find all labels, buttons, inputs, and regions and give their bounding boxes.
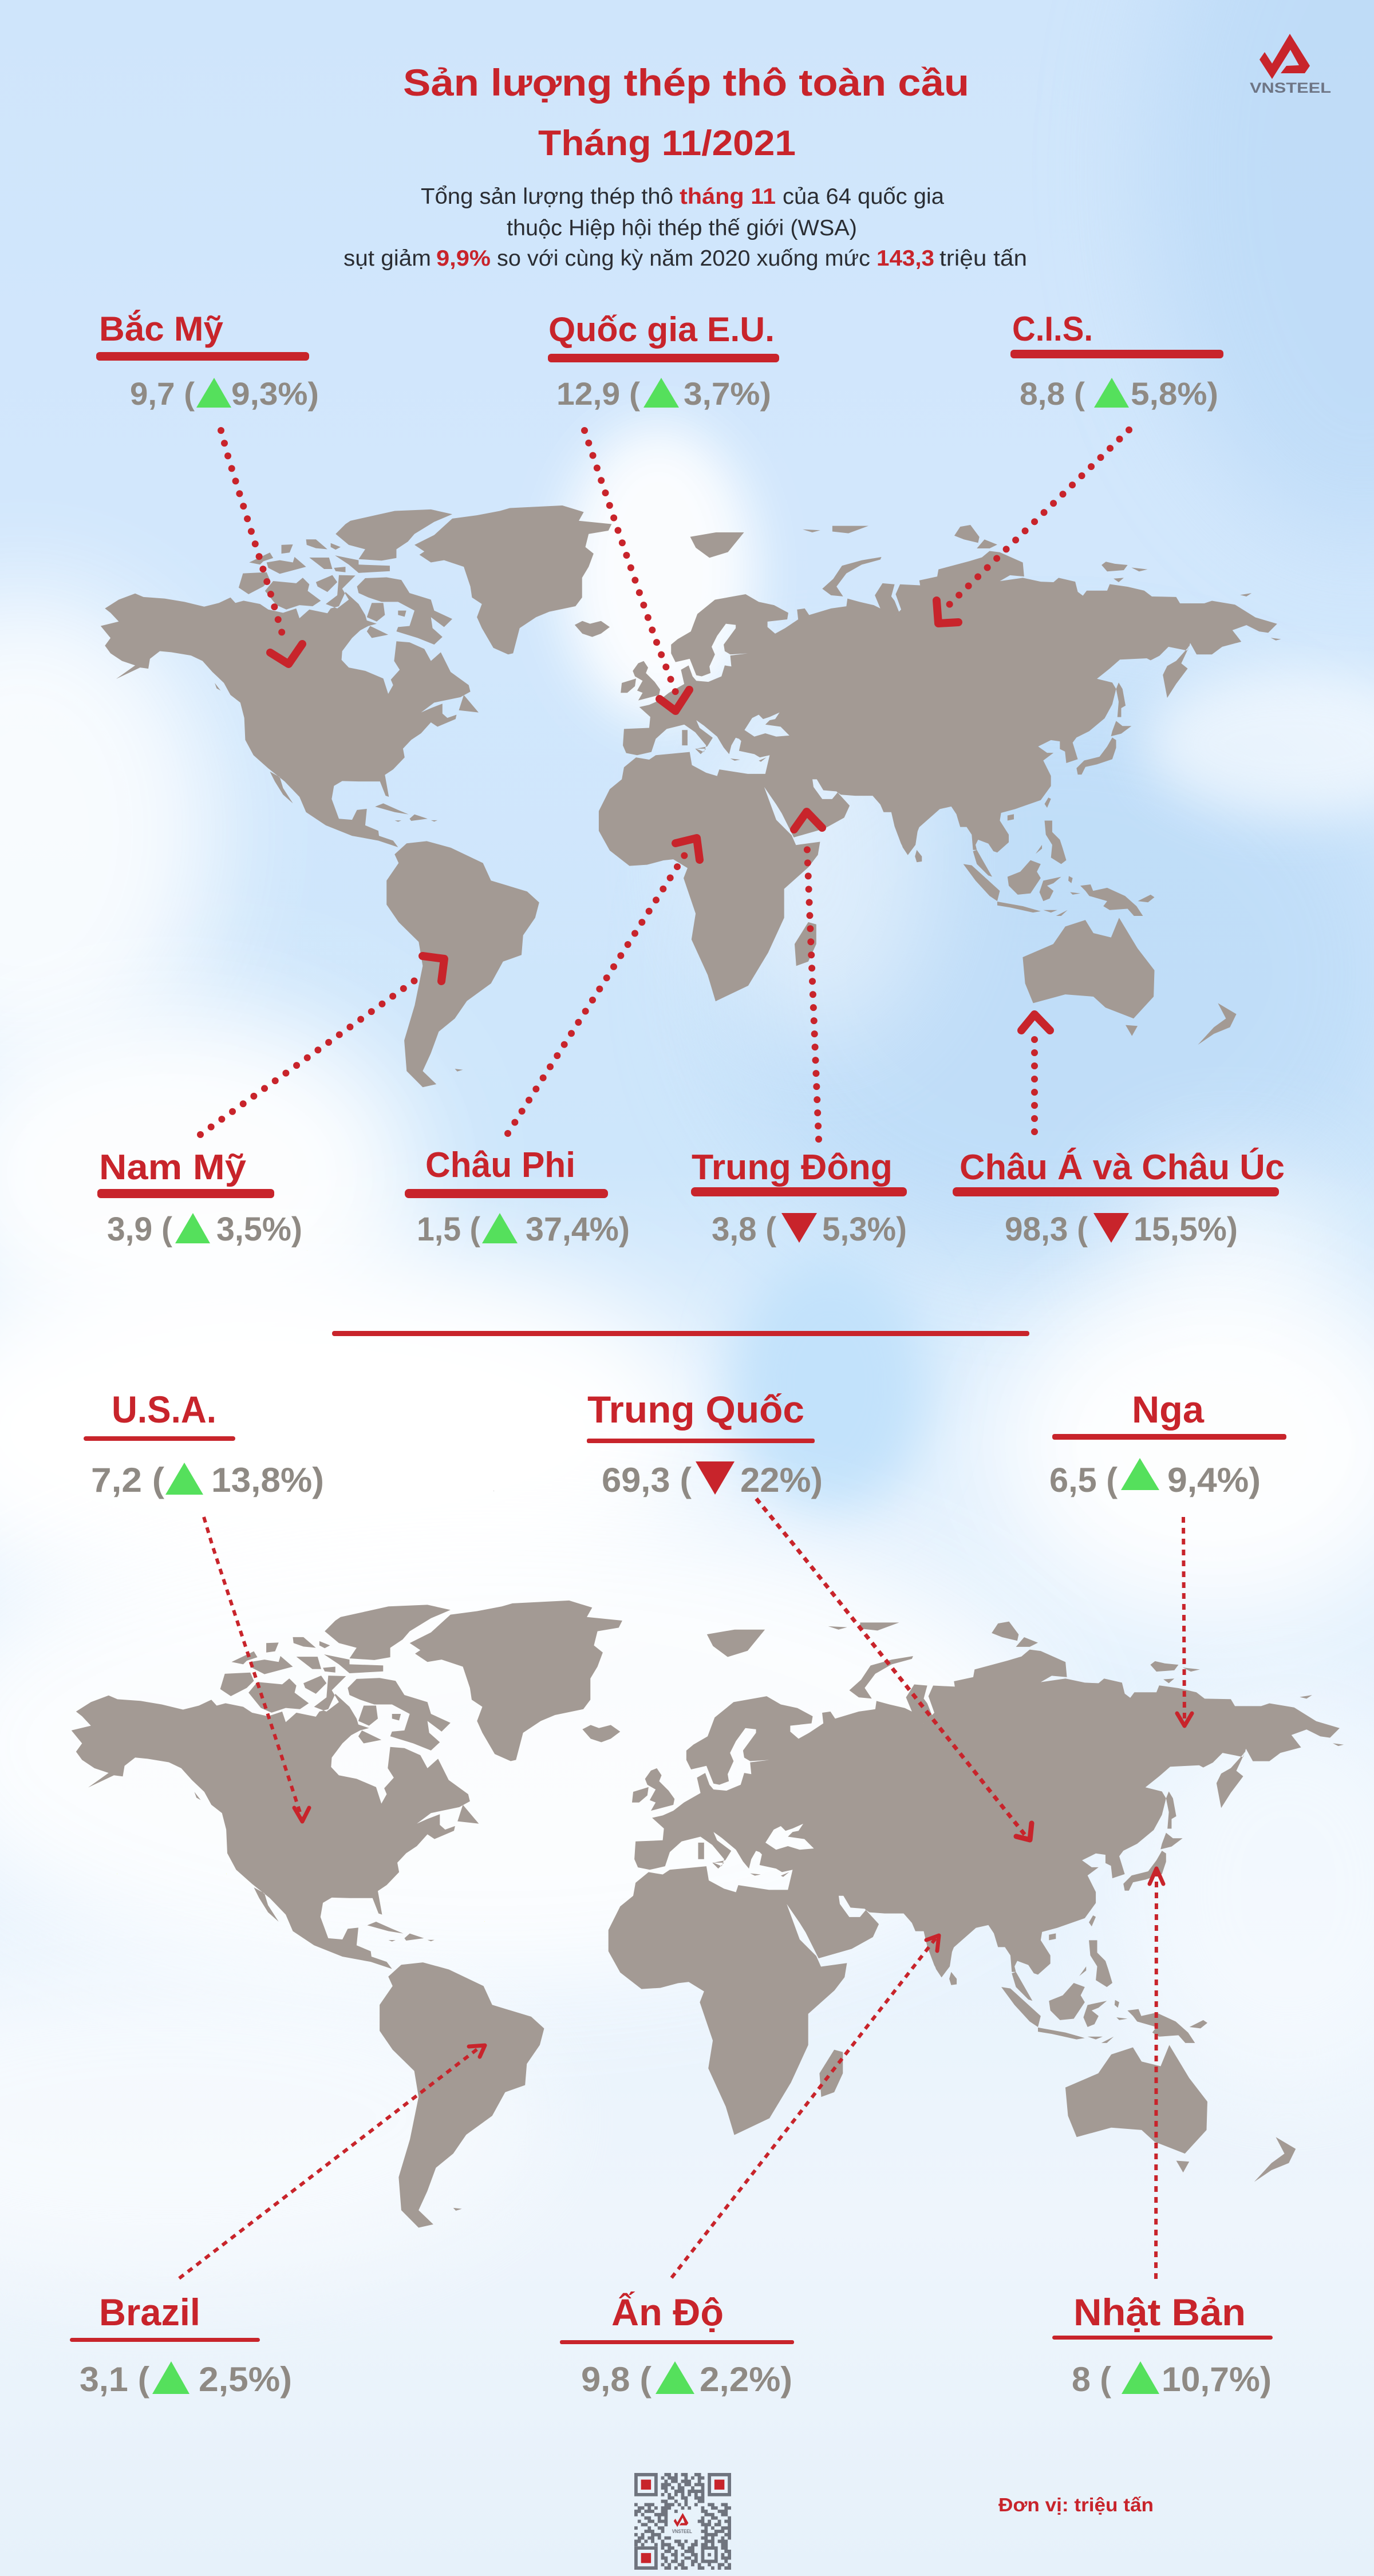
- panel: Quốc gia E.U.: 3,7%): [684, 376, 771, 412]
- panel: Châu Phi: [405, 1145, 630, 1248]
- intro text block: so với cùng kỳ năm 2020 xuống mức: [497, 246, 870, 271]
- panel: Ấn Độ: Ấn Độ: [611, 2291, 724, 2333]
- panel: C.I.S.: [1010, 310, 1223, 412]
- panel: Nga: Nga: [1132, 1388, 1205, 1431]
- panel: Châu Phi: 1,5 (: [417, 1211, 481, 1248]
- arrow: Ấn Độ: [672, 1935, 939, 2278]
- intro text block: thuộc Hiệp hội thép thế giới (WSA): [507, 216, 857, 240]
- panel: Nga: 9,4%): [1167, 1461, 1261, 1499]
- panel: Châu Á và Châu Úc: [953, 1148, 1285, 1248]
- panel: Nam Mỹ: 3,9 (: [107, 1211, 173, 1248]
- intro text block: của 64 quốc gia: [783, 184, 944, 209]
- panel: Châu Phi: Châu Phi: [425, 1145, 575, 1185]
- panel: Trung Quốc: Trung Quốc: [587, 1388, 804, 1431]
- panel: Ấn Độ: 9,8 (: [581, 2360, 652, 2399]
- panel: Trung Đông: [691, 1148, 907, 1248]
- panel: Quốc gia E.U.: 12,9 (: [556, 376, 640, 412]
- panel: Nhật Bản: Nhật Bản: [1073, 2291, 1246, 2333]
- panel: Trung Quốc: 69,3 (: [602, 1461, 692, 1499]
- arrow: Châu Á và Châu Úc: [1021, 1014, 1050, 1132]
- panel: Bắc Mỹ: 9,3%): [231, 376, 319, 412]
- panel: U.S.A.: 13,8%): [211, 1461, 324, 1499]
- panel: Brazil: 3,1 (: [80, 2360, 149, 2399]
- logo: VNSTEEL: VNSTEEL: [1250, 80, 1331, 96]
- panel: Nga: [1049, 1388, 1286, 1499]
- subtitle: month: Tháng 11/2021: [538, 124, 796, 163]
- QR code: VNSTEEL: [672, 2528, 692, 2534]
- panel: Trung Đông: 5,3%): [822, 1211, 907, 1248]
- panel: U.S.A.: U.S.A.: [112, 1388, 216, 1431]
- arrow: Nga: [1177, 1517, 1192, 1726]
- panel: Bắc Mỹ: 9,7 (: [130, 376, 195, 412]
- panel: U.S.A.: [84, 1388, 324, 1499]
- panel: Nam Mỹ: [97, 1148, 302, 1248]
- arrow: Bắc Mỹ: [221, 430, 302, 664]
- panel: Châu Á và Châu Úc: 15,5%): [1134, 1211, 1238, 1248]
- panel: Châu Phi: 37,4%): [526, 1211, 630, 1248]
- panel: Bắc Mỹ: [96, 310, 319, 412]
- panel: Trung Đông: 3,8 (: [712, 1211, 777, 1248]
- panel: Ấn Độ: 2,2%): [700, 2360, 792, 2399]
- arrow: Trung Quốc: [756, 1499, 1032, 1840]
- world map 1: [101, 505, 1281, 1087]
- panel: Ấn Độ: [560, 2291, 794, 2399]
- panel: Nga: 6,5 (: [1049, 1461, 1118, 1499]
- panel: Trung Quốc: 22%): [740, 1461, 823, 1499]
- intro text block: Tổng sản lượng thép thô: [421, 184, 673, 209]
- arrow: U.S.A.: [204, 1517, 309, 1822]
- panel: Nhật Bản: 8 (: [1072, 2360, 1111, 2399]
- arrow: Nhật Bản: [1150, 1868, 1163, 2279]
- panel: Brazil: [70, 2291, 292, 2399]
- panel: Châu Á và Châu Úc: Châu Á và Châu Úc: [960, 1148, 1285, 1187]
- panel: Châu Á và Châu Úc: 98,3 (: [1005, 1211, 1088, 1248]
- panel: Nhật Bản: [1052, 2291, 1273, 2399]
- arrow: Châu Phi: [508, 838, 700, 1133]
- intro text block: 143,3: [876, 246, 934, 271]
- panel: Bắc Mỹ: Bắc Mỹ: [99, 310, 224, 348]
- arrow: Quốc gia E.U.: [585, 430, 689, 711]
- world map 2: [72, 1601, 1344, 2228]
- panel: Quốc gia E.U.: Quốc gia E.U.: [548, 310, 775, 349]
- panel: U.S.A.: 7,2 (: [91, 1461, 164, 1499]
- intro text block: [344, 184, 1027, 271]
- arrow: C.I.S.: [937, 430, 1129, 623]
- divider: [332, 1331, 1029, 1336]
- panel: Trung Quốc: [587, 1388, 823, 1499]
- intro text block: 9,9%: [436, 246, 491, 271]
- intro text block: triệu tấn: [939, 246, 1027, 271]
- panel: Brazil: Brazil: [99, 2291, 200, 2333]
- panel: Brazil: 2,5%): [199, 2360, 292, 2399]
- unit note: Đơn vị: triệu tấn: [998, 2494, 1154, 2515]
- panel: Trung Đông: Trung Đông: [692, 1148, 893, 1187]
- panel: Quốc gia E.U.: [548, 310, 779, 412]
- title: Sản lượng thép thô toàn cầu: [403, 61, 969, 104]
- arrow: Nam Mỹ: [200, 956, 444, 1135]
- panel: Nam Mỹ: 3,5%): [216, 1211, 302, 1248]
- panel: Nam Mỹ: Nam Mỹ: [99, 1148, 247, 1187]
- panel: Nhật Bản: 10,7%): [1162, 2360, 1272, 2399]
- arrow: Trung Đông: [794, 812, 822, 1139]
- logo: VNSTEEL: [1250, 34, 1331, 96]
- panel: C.I.S.: 8,8 (: [1020, 376, 1085, 412]
- QR code: [634, 2473, 731, 2570]
- arrow: Brazil: [179, 2045, 485, 2278]
- intro text block: tháng 11: [680, 184, 776, 209]
- panel: C.I.S.: C.I.S.: [1012, 310, 1093, 348]
- panel: C.I.S.: 5,8%): [1131, 376, 1218, 412]
- intro text block: sụt giảm: [344, 246, 431, 271]
